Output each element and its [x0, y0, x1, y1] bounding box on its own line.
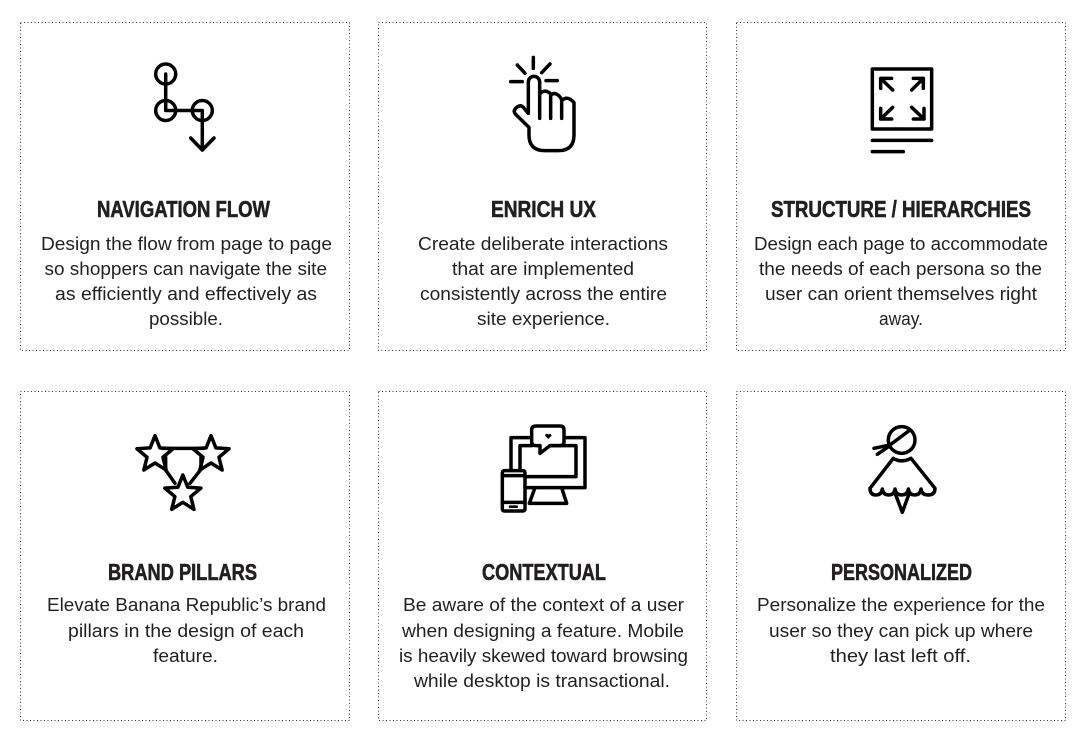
heading: brand pillars: BRAND PILLARS: [108, 559, 257, 585]
icon: navigation flow path: [156, 64, 214, 150]
text block: personalized description: they last left off.: [830, 645, 971, 666]
text block: navigation flow description: [41, 233, 332, 329]
text block: enrich ux description: that are implemented: [452, 258, 634, 279]
panel: navigation flow: [20, 22, 350, 350]
text block: brand pillars description: Elevate Banana Republic’s brand: [47, 594, 326, 615]
text block: enrich ux description: Create deliberate interactions: [418, 233, 668, 254]
text block: enrich ux description: site experience.: [477, 308, 610, 329]
text block: structure description: Design each page to accommodate: [754, 233, 1048, 254]
text block: personalized description: Personalize the experience for the: [757, 594, 1045, 615]
text block: structure description: [754, 233, 1048, 329]
panel: contextual: [378, 392, 706, 720]
text block: enrich ux description: [418, 233, 668, 329]
panel: brand pillars: [20, 392, 350, 720]
panel: structure / hierarchies: [736, 22, 1066, 350]
text block: contextual description: Be aware of the context of a user: [403, 594, 684, 615]
text block: navigation flow description: Design the flow from page to page: [41, 233, 332, 254]
text block: structure description: user can orient themselves right: [765, 283, 1037, 304]
text block: brand pillars description: pillars in the design of each: [68, 620, 304, 641]
text block: contextual description: when designing a feature. Mobile: [401, 620, 684, 641]
text block: brand pillars description: [47, 594, 326, 666]
text block: personalized description: [757, 594, 1045, 666]
icon: three connected stars: [137, 436, 229, 509]
icon: expanding page: [872, 69, 932, 152]
text block: structure description: the needs of each persona so the: [759, 258, 1042, 279]
text block: enrich ux description: consistently across the entire: [420, 283, 667, 304]
text block: contextual description: is heavily skewed toward browsing: [399, 645, 688, 666]
text block: contextual description: while desktop is transactional.: [413, 670, 670, 691]
panel: personalized: [736, 392, 1066, 720]
heading: personalized: PERSONALIZED: [831, 559, 972, 585]
text block: contextual description: [399, 594, 688, 691]
icon: tapping hand: [511, 57, 574, 151]
panel: enrich ux: [378, 22, 706, 350]
text block: personalized description: user so they can pick up where: [769, 620, 1033, 641]
heading: enrich ux: ENRICH UX: [491, 196, 597, 222]
icon: monitor, phone and chat bubble: [502, 426, 585, 511]
text block: brand pillars description: feature.: [153, 645, 218, 666]
icon: girl in a dress: [870, 427, 935, 512]
heading: navigation flow: NAVIGATION FLOW: [97, 196, 270, 222]
heading: structure / hierarchies: STRUCTURE / HIERARCHIES: [771, 196, 1031, 222]
text block: navigation flow description: so shoppers can navigate the site: [44, 258, 327, 279]
text block: navigation flow description: possible.: [149, 308, 223, 329]
heading: contextual: CONTEXTUAL: [482, 559, 606, 585]
text block: structure description: away.: [879, 308, 923, 329]
text block: navigation flow description: as efficiently and effectively as: [55, 283, 317, 304]
